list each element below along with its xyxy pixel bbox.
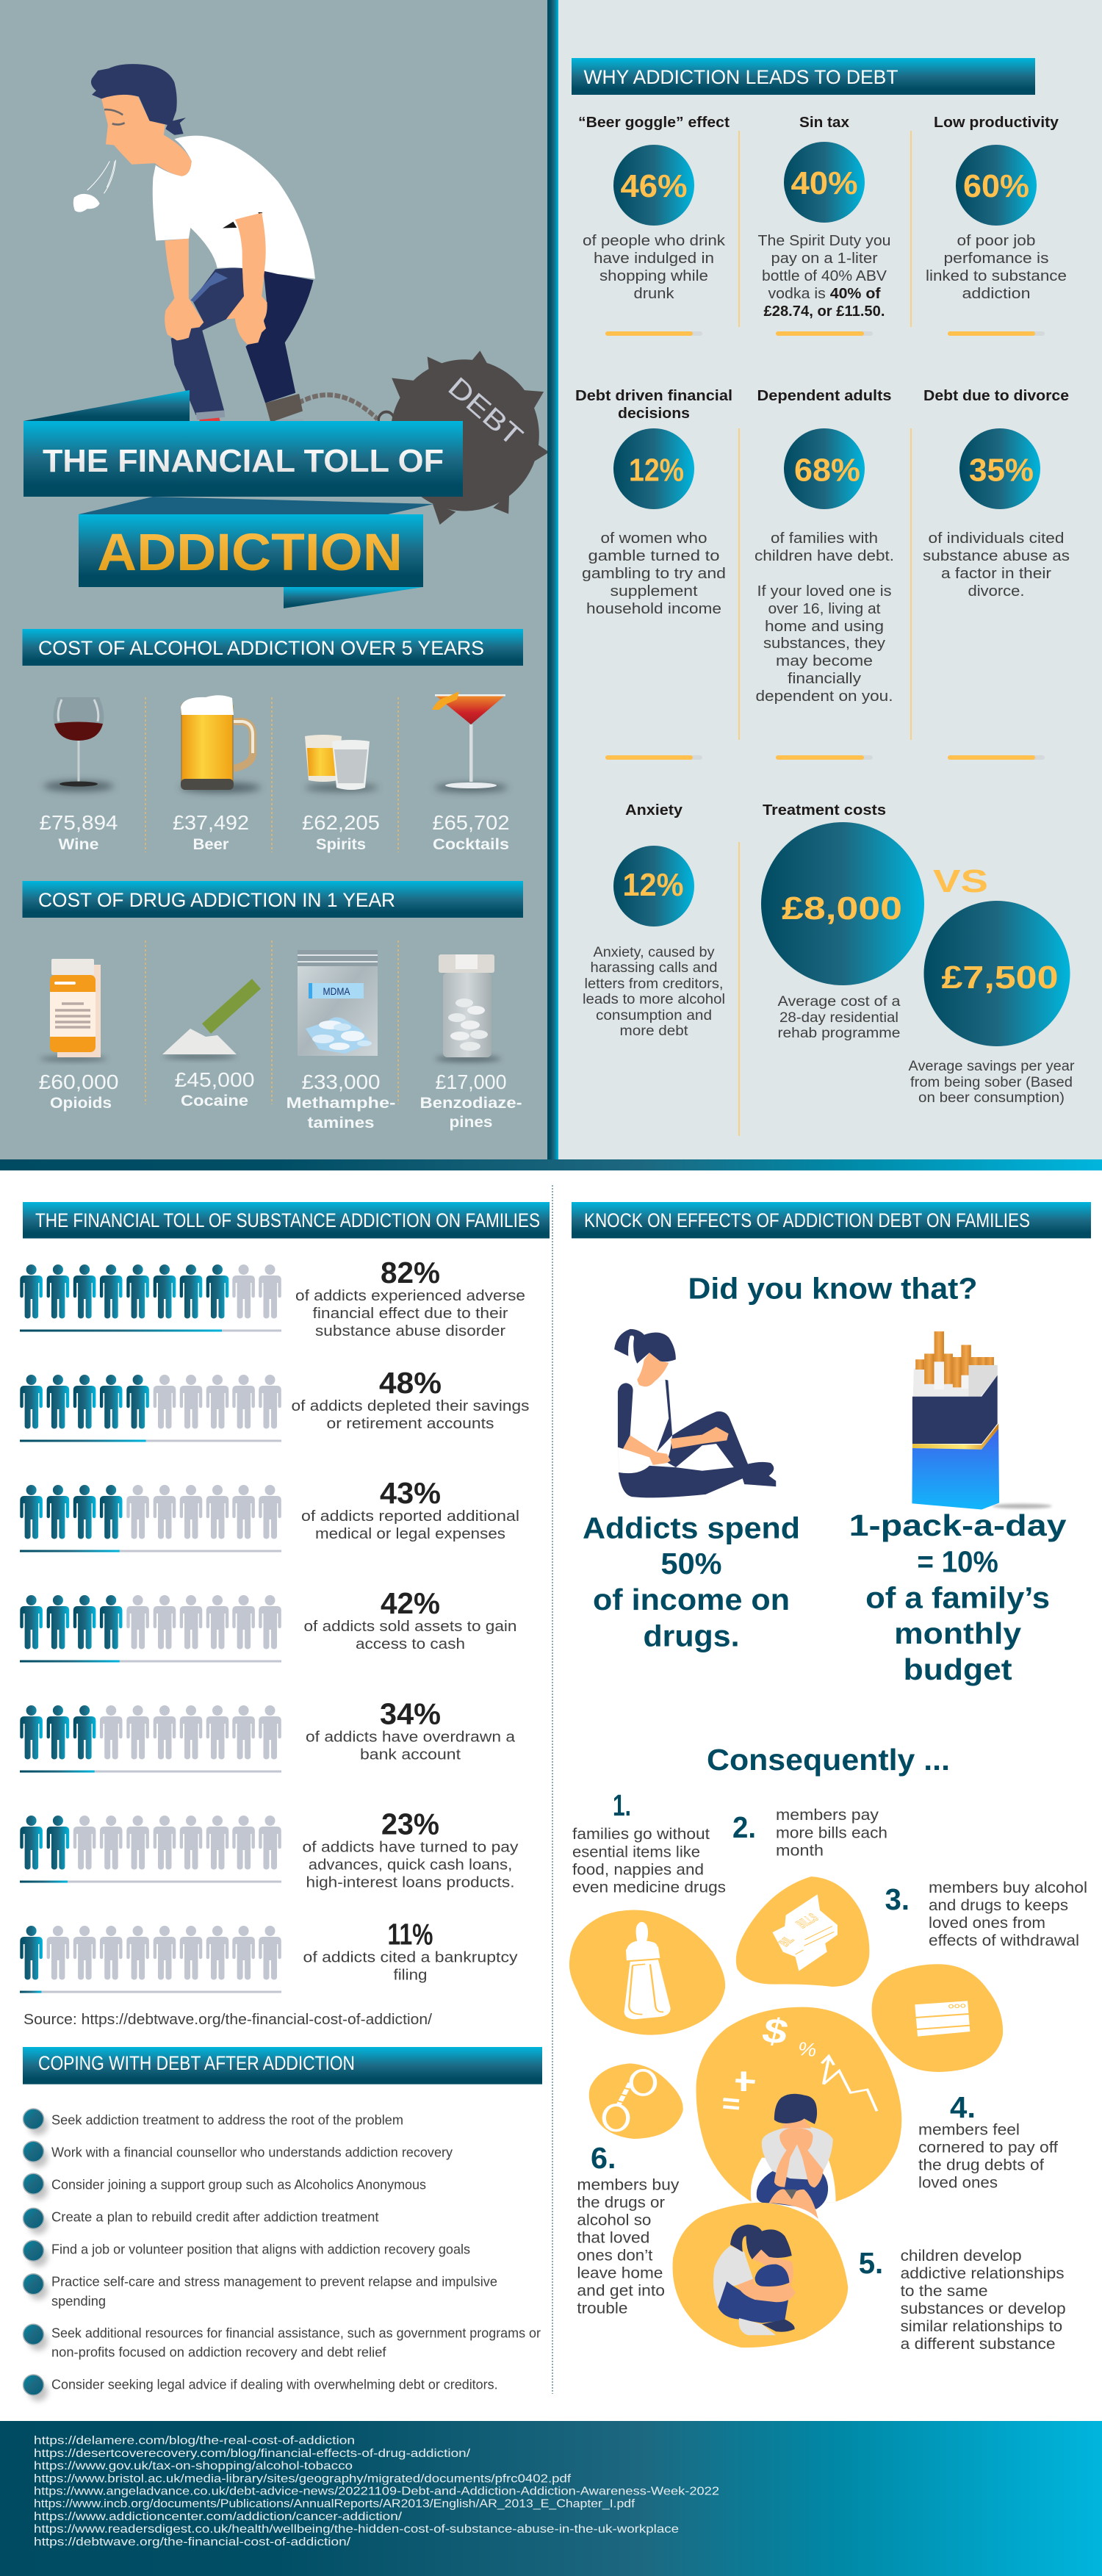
stat: addicts spend	[583, 1511, 800, 1653]
heading: consequently: Consequently ...	[707, 1743, 950, 1777]
pictogram row: 23 percent: of addicts have turned to pay	[303, 1840, 519, 1856]
stat: anxiety: harassing calls and	[591, 960, 717, 976]
stat: debt driven financial decisions: supplement	[610, 583, 698, 600]
consequence 2	[732, 1807, 887, 1860]
footer: sources: https://desertcoverecovery.com/blog/financial-effects-of-drug-addiction/	[34, 2447, 471, 2460]
pictogram row: 48 percent	[20, 1366, 529, 1442]
consequence 2: more bills each	[776, 1825, 887, 1842]
consequence 5: similar relationships to	[901, 2318, 1062, 2335]
footer: sources: https://debtwave.org/the-financial-cost-of-addiction/	[34, 2536, 351, 2548]
heading: financial toll	[23, 1202, 550, 1239]
stat: anxiety: letters from creditors,	[585, 976, 723, 992]
stat: addicts spend: 50%	[661, 1547, 721, 1580]
caption: sober savings: on beer consumption)	[918, 1090, 1065, 1106]
consequence 6: trouble	[577, 2300, 627, 2317]
section: cost of alcohol addiction	[22, 629, 523, 853]
icon: spirit glasses	[305, 735, 378, 791]
pictogram row: 34 percent: 34%	[380, 1697, 441, 1731]
stat: beer: Beer	[192, 836, 229, 853]
icon: percent: %	[796, 2038, 818, 2061]
stat: debt driven financial decisions	[575, 388, 732, 760]
consequence 6: that loved	[577, 2230, 649, 2247]
consequence 5	[859, 2246, 1066, 2353]
circle: rehab cost	[761, 822, 924, 985]
pictogram row: 82 percent: financial effect due to their	[313, 1306, 508, 1322]
stat: anxiety: Anxiety	[625, 802, 683, 819]
stat: opioids	[38, 1071, 119, 1112]
consequence 6: alcohol so	[577, 2212, 651, 2229]
list item 5	[24, 2240, 470, 2267]
stat: methamphetamines: tamines	[307, 1115, 375, 1132]
heading: alcohol	[22, 629, 523, 666]
consequence 2: members pay	[776, 1807, 879, 1824]
consequence 4: cornered to pay off	[918, 2140, 1058, 2156]
stat: low productivity: perfomance is	[943, 251, 1049, 267]
caption: sober savings	[908, 1059, 1075, 1106]
circle: sober savings: £7,500	[942, 960, 1058, 996]
heading: drugs: COST OF DRUG ADDICTION IN 1 YEAR	[38, 889, 395, 911]
stat: addicts spend: drugs.	[644, 1619, 739, 1653]
consequence 5: substances or develop	[901, 2300, 1066, 2317]
pictogram row: 43 percent: of addicts reported additional	[301, 1508, 519, 1525]
stat: debt driven financial decisions: of women who	[601, 530, 707, 547]
heading: knock on effects	[572, 1202, 1091, 1238]
pictogram row: 82 percent	[20, 1256, 525, 1339]
stat: sin tax: vodka is 40% of	[768, 286, 881, 302]
stat: low productivity: linked to substance	[926, 268, 1067, 284]
blob: bills: BIL	[776, 1935, 797, 1949]
pictogram row: 42 percent: of addicts sold assets to gain	[304, 1619, 517, 1635]
stat: wine: £75,894	[40, 811, 118, 834]
stat: dependent adults: children have debt.	[755, 548, 894, 564]
blob: bills	[736, 1877, 869, 1987]
pictogram row: 23 percent: advances, quick cash loans,	[309, 1857, 512, 1874]
icon: MDMA bag	[298, 950, 378, 1056]
stat: dependent adults: substances, they	[763, 636, 885, 652]
list item 1	[24, 2109, 403, 2135]
illustration: seated woman	[614, 1329, 776, 1497]
list item 2	[24, 2141, 453, 2167]
pictogram row: 11 percent: 11%	[388, 1918, 433, 1951]
consequence 6: leave home	[577, 2265, 663, 2282]
stat: debt driven financial decisions: Debt driven financial	[575, 388, 732, 404]
stat: debt driven financial decisions: gambling to try and	[582, 566, 726, 582]
stat: benzodiazepines: pines	[450, 1114, 492, 1131]
stat: cocktails: Cocktails	[433, 836, 509, 853]
stat: sin tax: Sin tax	[799, 115, 849, 131]
stat: debt due to divorce: divorce.	[968, 583, 1024, 600]
stat: anxiety	[583, 802, 725, 1039]
caption: sober savings: Average savings per year	[908, 1059, 1075, 1074]
stat: benzodiazepines: Benzodiaze-	[420, 1095, 522, 1112]
stat: dependent adults: may become	[776, 653, 873, 669]
consequence 1	[572, 1788, 726, 1896]
consequence 1: esential items like	[572, 1844, 700, 1861]
footer: sources: https://www.gov.uk/tax-on-shopping/alcohol-tobacco	[34, 2460, 353, 2472]
consequence 4: 4.	[950, 2090, 976, 2124]
pictogram row: 23 percent	[20, 1807, 519, 1891]
heading: coping	[23, 2047, 542, 2084]
pictogram row: 48 percent: or retirement accounts	[326, 1416, 494, 1432]
stat: sin tax: The Spirit Duty you	[758, 233, 890, 249]
stat: opioids: £60,000	[38, 1071, 119, 1093]
stat: treatment costs comparison	[761, 802, 1075, 1106]
consequence 3: effects of withdrawal	[929, 1932, 1079, 1949]
text: versus: VS	[933, 863, 988, 899]
stat: one pack a day: = 10%	[917, 1544, 998, 1578]
stat: dependent adults: home and using	[765, 619, 884, 635]
stat: opioids: Opioids	[50, 1095, 112, 1112]
stat: one pack a day: of a family’s	[865, 1581, 1050, 1615]
stat: one pack a day: monthly	[894, 1616, 1021, 1650]
stat: debt driven financial decisions: decisions	[618, 406, 690, 422]
consequence 6: 6.	[591, 2141, 616, 2175]
text: debt label on ball: DEBT	[442, 372, 528, 453]
caption: rehab cost: rehab programme	[777, 1026, 901, 1041]
stat: one pack a day: 1-pack-a-day	[849, 1508, 1067, 1542]
consequence 6: the drugs or	[577, 2195, 665, 2212]
consequence 1: food, nappies and	[572, 1862, 704, 1879]
consequence 4	[918, 2090, 1058, 2192]
stat: dependent adults: financially	[788, 671, 861, 687]
stat: sin tax: 40%	[791, 165, 858, 201]
consequence 5: children develop	[901, 2248, 1022, 2264]
blob cluster: consequences upper	[569, 1877, 1003, 2072]
pictogram row: 42 percent: 42%	[381, 1586, 440, 1620]
caption: rehab cost	[777, 994, 901, 1041]
stat: sin tax: pay on a 1-liter	[771, 251, 878, 267]
pictogram row: 82 percent: of addicts experienced adverse	[295, 1288, 525, 1304]
list item 5: Find a job or volunteer position that aligns with addiction recovery goals	[51, 2242, 470, 2257]
stat: anxiety: consumption and	[596, 1008, 712, 1023]
stat: anxiety: more debt	[620, 1023, 688, 1039]
pictogram row: 11 percent: of addicts cited a bankruptcy	[303, 1950, 517, 1966]
pictogram row: 23 percent: high-interest loans products.	[306, 1875, 514, 1891]
footer: sources: https://www.angeladvance.co.uk/debt-advice-news/20221109-Debt-and-Addiction-Addiction-Awareness-Week-2022	[34, 2486, 719, 2498]
blob: child hugging knees	[672, 2203, 848, 2347]
pictogram row: 11 percent: filing	[394, 1968, 428, 1984]
consequence 1: even medicine drugs	[572, 1879, 726, 1896]
list item 6	[24, 2274, 497, 2309]
list item 7	[24, 2324, 541, 2360]
icon: beer mug	[180, 695, 261, 793]
list item 3	[24, 2173, 426, 2200]
stat: beer goggle effect	[578, 115, 730, 336]
stat: beer: £37,492	[173, 811, 249, 834]
panel: financial toll on families	[20, 1202, 550, 2028]
icon: wine glass	[43, 697, 114, 791]
list item 6: Practice self-care and stress management to prevent relapse and impulsive	[51, 2275, 497, 2289]
stat: debt driven financial decisions: household income	[586, 601, 721, 617]
stat: dependent adults: over 16, living at	[768, 601, 881, 617]
stat: dependent adults	[755, 388, 894, 760]
caption: rehab cost: 28-day residential	[779, 1010, 898, 1026]
consequence 6	[577, 2141, 680, 2317]
stat: debt due to divorce: of individuals cited	[929, 530, 1064, 547]
label: MDMA: MDMA	[323, 985, 350, 997]
circle: sober savings	[924, 901, 1070, 1046]
section: cost of drug addiction	[22, 881, 523, 1132]
icon: plus	[735, 2071, 755, 2091]
blob: bills: BILLS	[793, 1911, 821, 1931]
stat: anxiety: leads to more alcohol	[583, 992, 725, 1007]
stat: wine: Wine	[59, 836, 98, 853]
panel: why addiction leads to debt	[0, 0, 1102, 1170]
stat: methamphetamines: £33,000	[301, 1071, 381, 1093]
stat: sin tax	[758, 115, 890, 336]
consequence 1: 1.	[613, 1788, 631, 1822]
stat: methamphetamines	[287, 1071, 395, 1132]
pictogram row: 34 percent: bank account	[360, 1747, 461, 1763]
pictogram row: 34 percent	[20, 1697, 516, 1772]
stat: beer goggle effect: have indulged in	[594, 251, 714, 267]
blob cluster: consequences lower	[589, 2007, 901, 2347]
icon: cocaine and straw	[162, 984, 256, 1059]
panel: coping with debt	[23, 2047, 542, 2401]
list item 4	[24, 2208, 379, 2234]
stat: cocaine: Cocaine	[181, 1093, 248, 1109]
stat: methamphetamines: Methamphe-	[287, 1095, 395, 1112]
icon: cocktail glass	[432, 691, 508, 792]
stat: debt due to divorce: Debt due to divorce	[923, 388, 1069, 404]
stat: dependent adults: Dependent adults	[757, 388, 892, 404]
consequence 4: members feel	[918, 2122, 1020, 2139]
footer: sources	[0, 2421, 1102, 2576]
stat: debt driven financial decisions: gamble turned to	[588, 548, 720, 564]
list item 1: Seek addiction treatment to address the root of the problem	[51, 2113, 403, 2128]
caption: sober savings: from being sober (Based	[910, 1075, 1073, 1090]
stat: benzodiazepines	[420, 1071, 522, 1131]
footer: sources: https://delamere.com/blog/the-real-cost-of-addiction	[34, 2435, 355, 2447]
illustration: man chained to debt ball	[73, 64, 549, 525]
pictogram row: 48 percent: 48%	[379, 1366, 442, 1400]
consequence 2: 2.	[732, 1810, 756, 1844]
consequence 3: members buy alcohol	[929, 1879, 1087, 1896]
stat: low productivity: Low productivity	[934, 115, 1059, 131]
stat: anxiety: Anxiety, caused by	[594, 945, 715, 960]
stat: dependent adults: dependent on you.	[755, 688, 893, 705]
stat: cocaine	[175, 1068, 254, 1109]
consequence 5: 5.	[859, 2246, 883, 2280]
icon: equals	[723, 2099, 739, 2108]
list item 3: Consider joining a support group such as Alcoholics Anonymous	[51, 2178, 426, 2192]
stat: low productivity: of poor job	[957, 233, 1036, 249]
blob: crying woman and money symbols	[696, 2007, 901, 2219]
pictogram row: 42 percent	[20, 1586, 517, 1662]
pictogram row: 42 percent: access to cash	[356, 1636, 465, 1652]
stat: wine	[40, 811, 118, 853]
pictogram row: 43 percent: 43%	[380, 1476, 441, 1510]
heading: why addiction	[572, 58, 1035, 95]
stat: beer goggle effect: shopping while	[599, 268, 708, 284]
title line 1: THE FINANCIAL TOLL OF	[43, 443, 444, 479]
stat: debt driven financial decisions: 12%	[629, 453, 684, 488]
pictogram row: 34 percent: of addicts have overdrawn a	[306, 1730, 516, 1746]
stat: low productivity: addiction	[962, 286, 1030, 302]
footer: sources: https://www.bristol.ac.uk/media-library/sites/geography/migrated/documents/pfrc0402.pdf	[34, 2472, 572, 2485]
heading: why addiction: WHY ADDICTION LEADS TO DEBT	[583, 66, 898, 88]
pictogram row: 43 percent: medical or legal expenses	[315, 1526, 505, 1542]
list item 8	[24, 2375, 498, 2401]
consequence 4: the drug debts of	[918, 2157, 1044, 2174]
stat: spirits: £62,205	[302, 811, 380, 834]
stat: spirits: Spirits	[316, 836, 366, 853]
stat: low productivity: 60%	[963, 168, 1029, 204]
footer: sources: https://www.incb.org/documents/Publications/AnnualReports/AR2013/English/AR_2013_E_Chapter_I.pdf	[34, 2498, 635, 2511]
footer: sources: https://www.readersdigest.co.uk/health/wellbeing/the-hidden-cost-of-substance-abuse-in-the-uk-workplace	[34, 2523, 679, 2536]
stat: beer goggle effect: drunk	[633, 286, 675, 302]
stat: benzodiazepines: £17,000	[435, 1071, 507, 1093]
stat: beer goggle effect: 46%	[620, 168, 688, 204]
stat: beer goggle effect: of people who drink	[583, 233, 726, 249]
list item 6: spending	[51, 2294, 106, 2309]
pictogram row: 23 percent: 23%	[381, 1807, 439, 1841]
list item 7: Seek additional resources for financial assistance, such as government programs or	[51, 2326, 541, 2341]
consequence 3: 3.	[885, 1882, 910, 1916]
title line 2: ADDICTION	[97, 524, 403, 582]
stat: sin tax: bottle of 40% ABV	[762, 268, 887, 284]
illustration: man	[73, 64, 315, 423]
heading: financial toll: THE FINANCIAL TOLL OF SUBSTANCE ADDICTION ON FAMILIES	[35, 1209, 540, 1231]
icon: dollar sign: $	[758, 2011, 792, 2052]
stat: low productivity	[926, 115, 1067, 336]
blob: handcuffs	[589, 2063, 683, 2139]
stat: beer	[173, 811, 249, 853]
stat: addicts spend: Addicts spend	[583, 1511, 800, 1545]
source note: Source: https://debtwave.org/the-financial-cost-of-addiction/	[24, 2012, 432, 2028]
stat: dependent adults: 68%	[794, 453, 860, 488]
consequence 1: families go without	[572, 1826, 710, 1843]
footer: sources: https://www.addictioncenter.com/addiction/cancer-addiction/	[34, 2511, 403, 2523]
label: MDMA	[309, 983, 364, 999]
list item 4: Create a plan to rebuild credit after addiction treatment	[51, 2210, 379, 2225]
consequence 5: addictive relationships	[901, 2265, 1065, 2282]
consequence 4: loved ones	[918, 2175, 998, 2192]
heading: drugs	[22, 881, 523, 918]
consequence 2: month	[776, 1843, 824, 1860]
blob: credit card	[872, 1964, 1003, 2072]
pictogram row: 48 percent: of addicts depleted their savings	[291, 1398, 529, 1414]
pictogram row: 82 percent: 82%	[381, 1256, 440, 1289]
panel: knock on effects	[569, 1202, 1091, 2353]
consequence 6: and get into	[577, 2283, 665, 2300]
stat: sin tax: £28.74, or £11.50.	[764, 303, 885, 320]
stat: cocktails: £65,702	[432, 811, 510, 834]
stat: cocktails	[432, 811, 510, 853]
list item 2: Work with a financial counsellor who understands addiction recovery	[51, 2145, 453, 2160]
stat: one pack a day: budget	[904, 1652, 1012, 1686]
heading: alcohol: COST OF ALCOHOL ADDICTION OVER 5 YEARS	[38, 637, 484, 659]
consequence 5: a different substance	[901, 2336, 1056, 2353]
pictogram row: 43 percent	[20, 1476, 519, 1552]
stat: spirits	[302, 811, 380, 853]
illustration: cigarette pack	[912, 1331, 1052, 1510]
consequence 3: loved ones from	[929, 1915, 1045, 1932]
list item 7: non-profits focused on addiction recovery and debt relief	[51, 2345, 387, 2360]
icon: opioid bottle	[40, 959, 107, 1061]
stat: debt due to divorce	[923, 388, 1070, 760]
blob: baby bottle	[569, 1910, 725, 2035]
caption: rehab cost: Average cost of a	[777, 994, 901, 1010]
list item 8: Consider seeking legal advice if dealing with overwhelming debt or creditors.	[51, 2378, 498, 2392]
stat: dependent adults: of families with	[771, 530, 878, 547]
consequence 5: to the same	[901, 2283, 988, 2300]
stat: addicts spend: of income on	[593, 1583, 790, 1616]
icon: debt ball	[298, 350, 549, 525]
panel: cover and costs	[0, 0, 549, 1159]
stat: treatment costs comparison: Treatment costs	[763, 802, 886, 819]
stat: one pack a day	[849, 1508, 1067, 1686]
pictogram row: 11 percent	[20, 1918, 517, 1993]
pictogram row: 82 percent: substance abuse disorder	[315, 1323, 505, 1339]
heading: coping: COPING WITH DEBT AFTER ADDICTION	[38, 2052, 355, 2074]
circle: rehab cost: £8,000	[782, 891, 902, 927]
consequence 3	[885, 1879, 1087, 1949]
stat: debt due to divorce: 35%	[969, 453, 1034, 488]
stat: cocaine: £45,000	[175, 1068, 254, 1091]
stat: debt due to divorce: substance abuse as	[923, 548, 1070, 564]
consequence 3: and drugs to keeps	[929, 1897, 1068, 1914]
icon: benzodiazepine bottle	[435, 954, 501, 1062]
title banner	[24, 390, 463, 608]
stat: debt due to divorce: a factor in their	[941, 566, 1051, 582]
stat: beer goggle effect: “Beer goggle” effect	[578, 115, 730, 131]
stat: dependent adults: If your loved one is	[757, 583, 892, 600]
icon: falling chart arrow	[821, 2056, 877, 2111]
consequence 6: members buy	[577, 2177, 680, 2194]
heading: did you know: Did you know that?	[688, 1272, 977, 1306]
consequence 6: ones don’t	[577, 2248, 653, 2264]
stat: anxiety: 12%	[623, 867, 683, 903]
